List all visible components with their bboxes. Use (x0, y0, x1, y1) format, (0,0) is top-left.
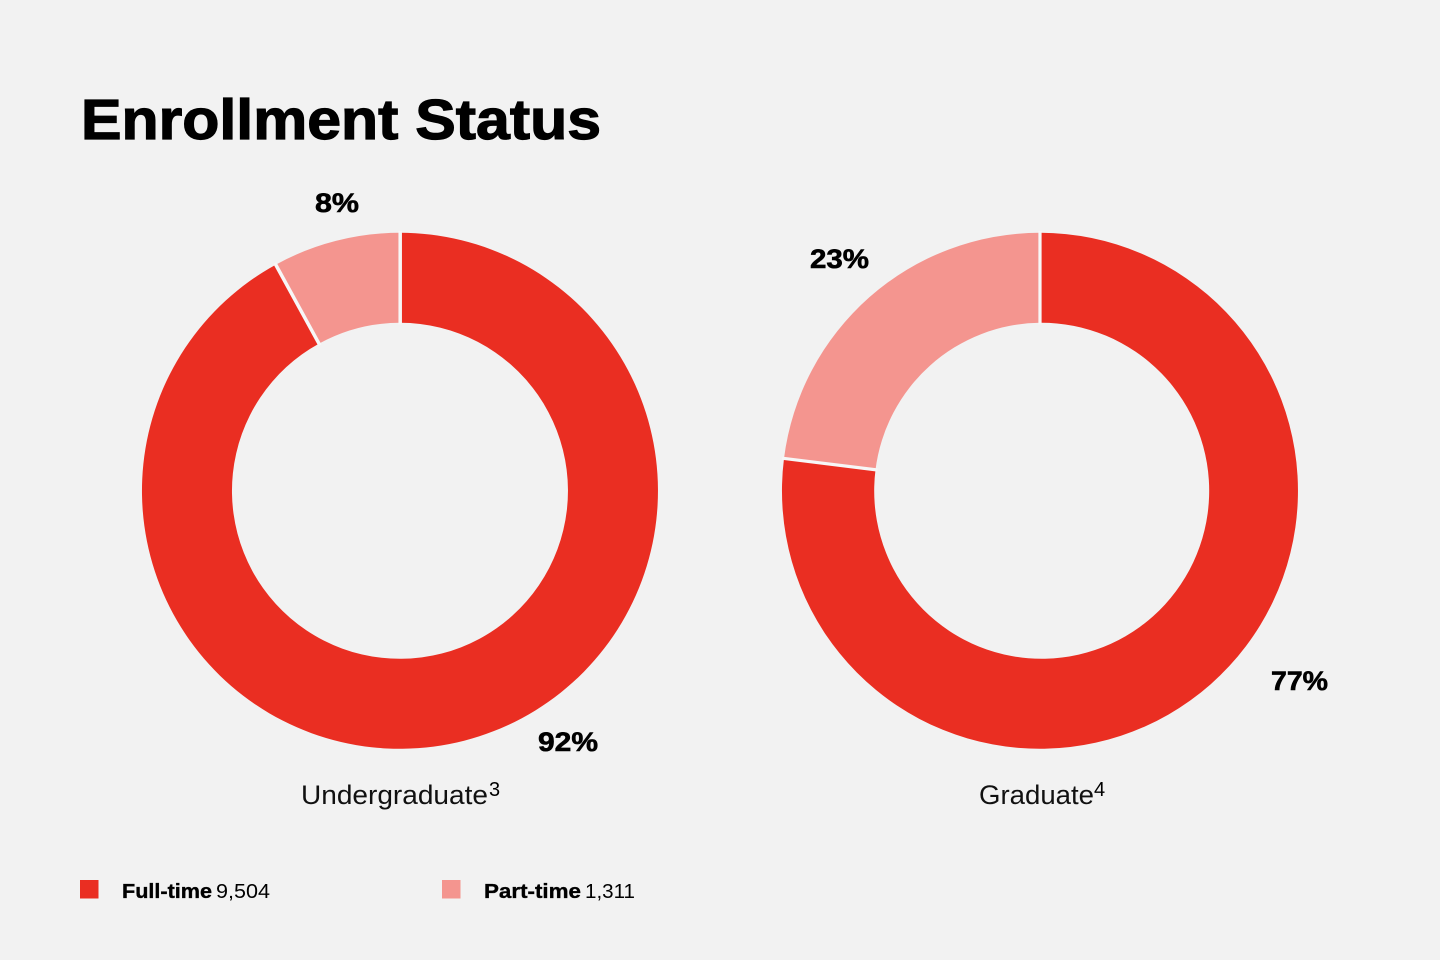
caption: undergraduate: Undergraduate (301, 780, 488, 810)
legend: full-time (80, 880, 270, 903)
label: 23%: 23% (810, 244, 869, 274)
segment: graduate full-time 77% (782, 233, 1298, 749)
caption: graduate: Graduate (979, 780, 1094, 810)
title: Enrollment Status (81, 88, 601, 152)
caption: undergraduate: 3 (489, 779, 500, 801)
legend: part-time: 1,311 (585, 881, 635, 903)
label: 8%: 8% (315, 188, 359, 218)
segment: undergraduate full-time 92% (142, 233, 658, 749)
swatch: part-time (442, 880, 460, 898)
donut chart: graduate (782, 231, 1298, 749)
caption: graduate: 4 (1094, 779, 1105, 801)
legend: part-time (442, 880, 635, 903)
label: 92%: 92% (538, 727, 598, 757)
segment: undergraduate part-time 8% (276, 233, 400, 344)
legend text: full-time: Full-time (122, 881, 212, 903)
legend: full-time: 9,504 (216, 881, 270, 903)
segment: graduate part-time 23% (784, 233, 1040, 470)
separators: graduate (782, 231, 1040, 470)
swatch: full-time (80, 880, 98, 898)
donut chart: undergraduate (142, 231, 658, 749)
separators: undergraduate (275, 231, 400, 345)
label: 77%: 77% (1271, 666, 1328, 696)
legend text: part-time: Part-time (484, 881, 581, 903)
